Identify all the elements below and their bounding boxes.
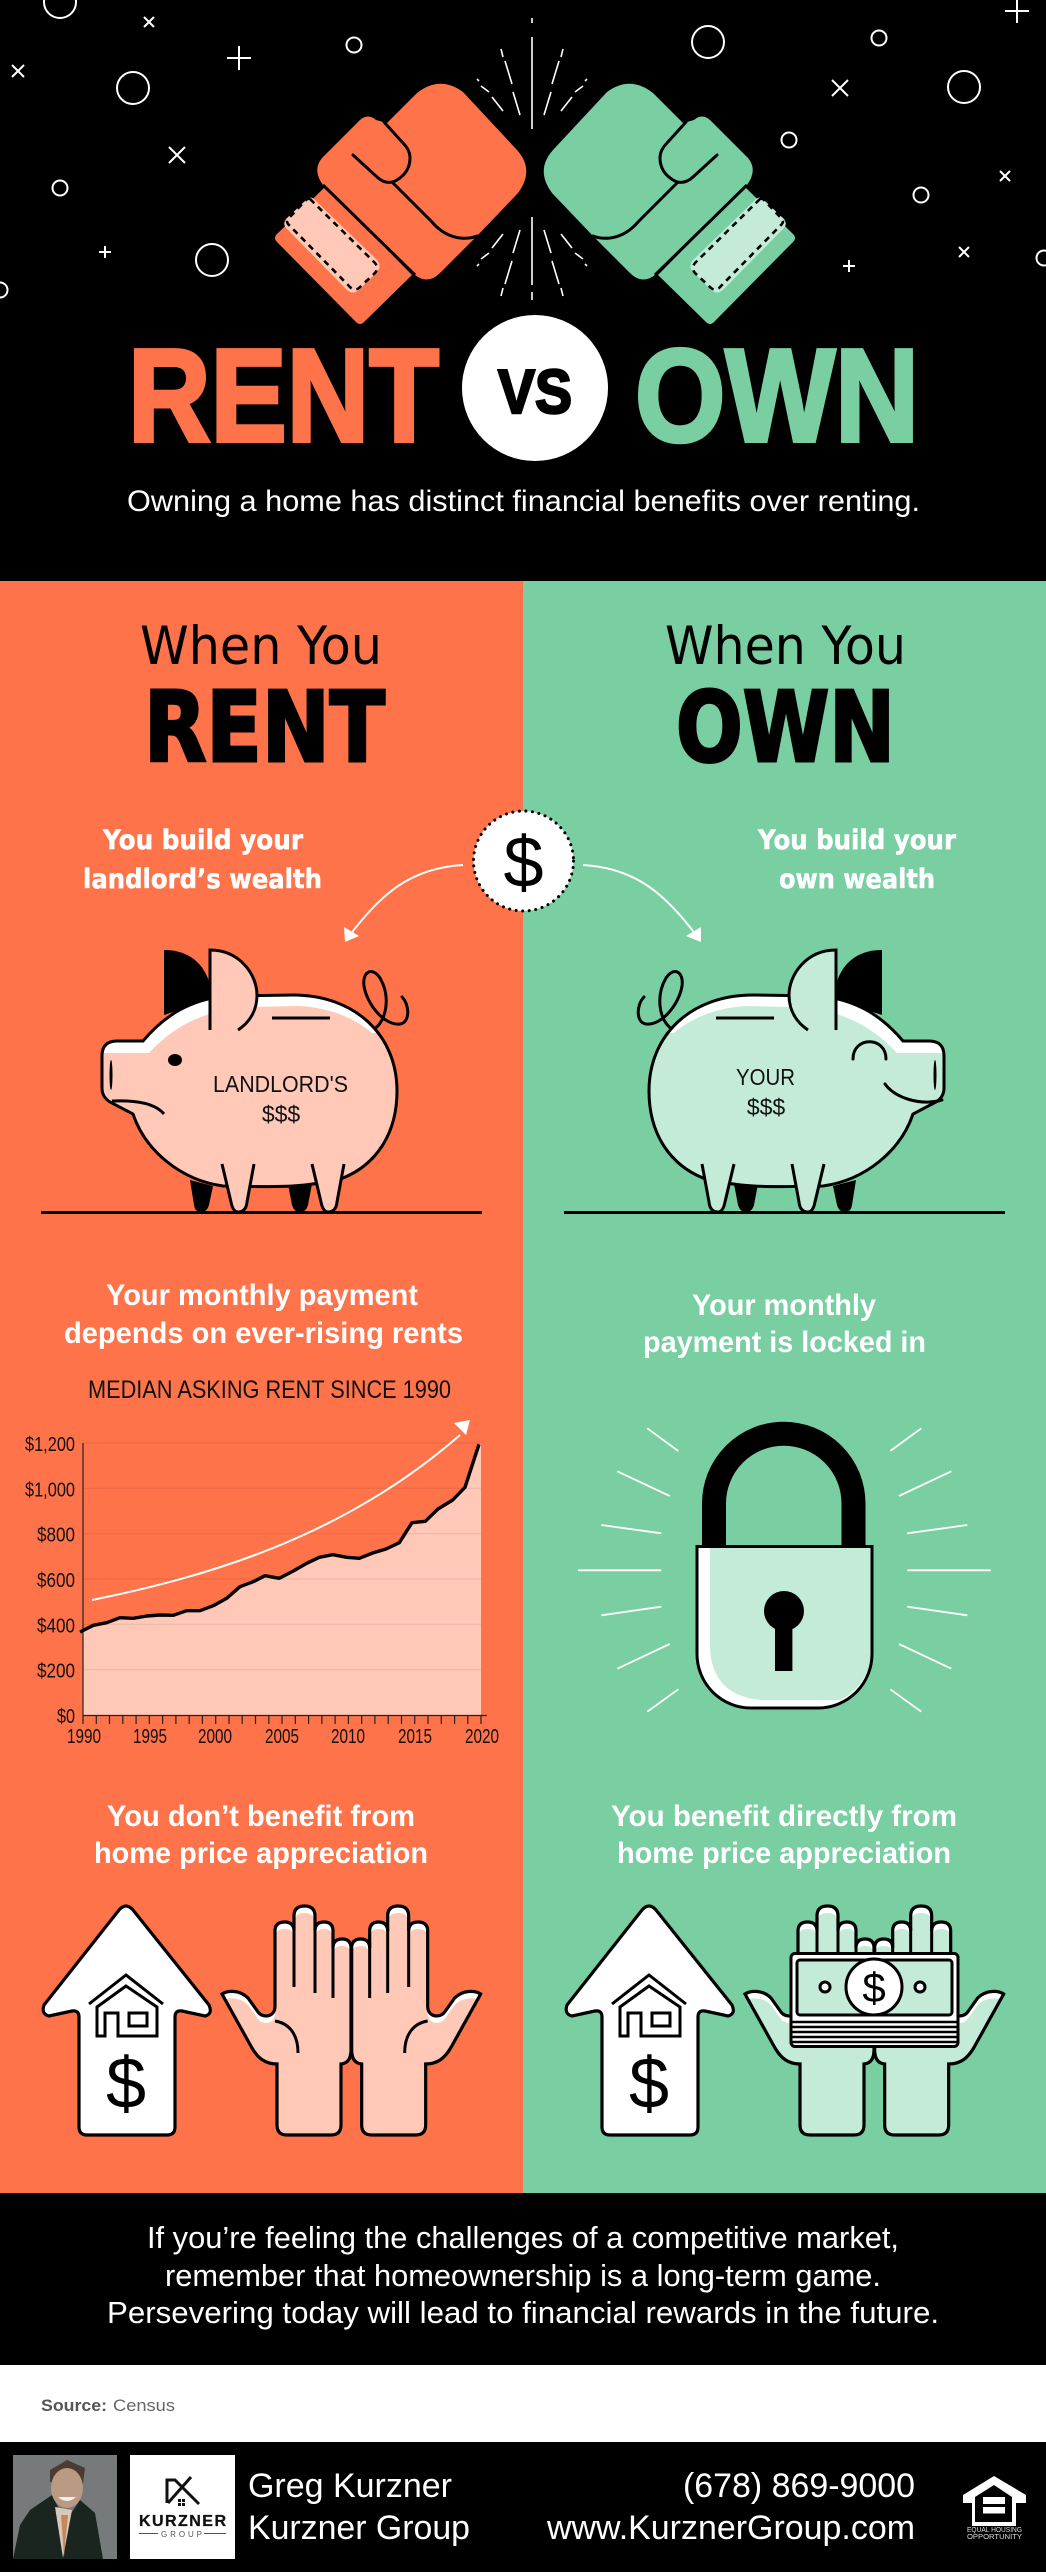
panel: source bbox=[0, 2365, 1046, 2442]
icon: orange boxing glove bbox=[275, 84, 526, 324]
panel: when you own bbox=[523, 581, 1046, 2193]
icon: happy piggy bank bbox=[564, 950, 1005, 1212]
logo: Kurzner Group: GROUP bbox=[161, 2530, 202, 2539]
agent name bbox=[248, 2467, 470, 2547]
text: you don't benefit from home price appreciation bbox=[94, 1800, 428, 1870]
panel: closing message: Persevering today will lead to financial rewards in the future. bbox=[107, 2295, 939, 2330]
heading: when you rent: RENT bbox=[144, 671, 385, 784]
subtitle: Owning a home has distinct financial benefits over renting. bbox=[127, 485, 920, 518]
panel: source: Census bbox=[113, 2396, 175, 2415]
axes and ticks bbox=[83, 1443, 487, 1724]
burst rays between gloves bbox=[477, 18, 587, 300]
icon: hands holding money bbox=[745, 1906, 1004, 2142]
text: you benefit directly from home price appreciation: home price appreciation bbox=[617, 1837, 951, 1870]
y axis labels bbox=[25, 1434, 75, 1728]
arrow: rising trend bbox=[92, 1420, 470, 1600]
x axis labels: 2020 bbox=[465, 1726, 499, 1748]
icon: padlock with rays bbox=[578, 1428, 991, 1712]
money stack: $ bbox=[862, 1964, 886, 2011]
badge: vs: VS bbox=[498, 358, 572, 427]
text: you build your own wealth: You build your bbox=[757, 825, 957, 856]
agent name: Greg Kurzner bbox=[248, 2467, 452, 2505]
panel: when you rent bbox=[0, 581, 523, 2193]
text: you build your landlord's wealth bbox=[83, 825, 322, 895]
icon: house arrow with dollar: $ bbox=[106, 2044, 146, 2124]
y axis labels: $800 bbox=[37, 1525, 75, 1547]
x axis labels: 2000 bbox=[198, 1726, 232, 1748]
x axis labels: 1995 bbox=[133, 1726, 167, 1748]
y axis labels: $600 bbox=[37, 1570, 75, 1592]
x axis labels bbox=[67, 1726, 499, 1748]
heading: when you rent bbox=[140, 616, 385, 784]
arrow to own pig bbox=[583, 865, 701, 942]
agent contact: www.KurznerGroup.com bbox=[546, 2509, 915, 2547]
icon: dollar coin with arrows: $ bbox=[503, 823, 544, 903]
chart: median asking rent since 1990 bbox=[25, 1376, 499, 1748]
icon: house arrow with dollar: $ bbox=[629, 2044, 669, 2124]
text: your monthly payment is locked in: payment is locked in bbox=[643, 1326, 926, 1359]
text: you build your own wealth: own wealth bbox=[779, 864, 935, 895]
heading: when you rent: When You bbox=[140, 616, 382, 677]
arrow to landlord pig bbox=[344, 865, 463, 942]
icon: green boxing glove bbox=[544, 84, 795, 324]
heading: when you own bbox=[665, 616, 906, 784]
text: you build your landlord's wealth: landlord’s wealth bbox=[83, 864, 322, 895]
text: your monthly payment depends on ever-rising rents: Your monthly payment bbox=[106, 1279, 418, 1312]
x axis labels: 1990 bbox=[67, 1726, 101, 1748]
title: RENT: RENT bbox=[128, 322, 439, 469]
chart title: MEDIAN ASKING RENT SINCE 1990 bbox=[88, 1376, 451, 1404]
text: you benefit directly from home price appreciation bbox=[611, 1800, 957, 1870]
text: you benefit directly from home price appreciation: You benefit directly from bbox=[611, 1800, 957, 1833]
lock rays bbox=[578, 1428, 991, 1712]
text: your monthly payment is locked in: Your monthly bbox=[692, 1289, 876, 1322]
agent contact: (678) 869-9000 bbox=[683, 2467, 915, 2505]
panel: closing message bbox=[0, 2193, 1046, 2365]
icon: empty open hands bbox=[222, 1906, 481, 2142]
text: your monthly payment is locked in bbox=[643, 1289, 926, 1359]
icon: equal housing opportunity bbox=[963, 2476, 1026, 2541]
icon: equal housing opportunity: EQUAL HOUSING bbox=[967, 2525, 1022, 2534]
agent photo bbox=[13, 2455, 117, 2559]
text: you don't benefit from home price appreciation: home price appreciation bbox=[94, 1837, 428, 1870]
y axis labels: $400 bbox=[37, 1615, 75, 1637]
x axis labels: 2010 bbox=[331, 1726, 365, 1748]
heading: when you own: OWN bbox=[676, 671, 895, 784]
text: you don't benefit from home price appreciation: You don’t benefit from bbox=[107, 1800, 415, 1833]
y axis labels: $200 bbox=[37, 1661, 75, 1683]
y axis labels: $1,200 bbox=[25, 1434, 75, 1456]
icon: sad landlord piggy bank bbox=[41, 950, 482, 1212]
logo: Kurzner Group: KURZNER bbox=[139, 2513, 226, 2530]
icon: happy piggy bank: YOUR bbox=[736, 1064, 795, 1090]
agent name: Kurzner Group bbox=[248, 2509, 470, 2547]
rent line bbox=[80, 1444, 479, 1632]
icon: house arrow with dollar bbox=[43, 1906, 210, 2135]
icon: dollar coin with arrows bbox=[344, 811, 701, 942]
heading: when you own: When You bbox=[665, 616, 906, 677]
icon: house arrow with dollar bbox=[566, 1906, 733, 2135]
icon: sad landlord piggy bank: $$$ bbox=[262, 1101, 300, 1127]
panel: source: Source: bbox=[41, 2396, 107, 2415]
icon: equal housing opportunity: OPPORTUNITY bbox=[967, 2532, 1022, 2541]
text: you build your own wealth bbox=[757, 825, 957, 895]
panel: closing message: remember that homeownership is a long-term game. bbox=[165, 2258, 881, 2293]
panel: header bbox=[0, 0, 1046, 581]
money stack bbox=[791, 1954, 958, 2046]
y axis labels: $1,000 bbox=[25, 1479, 75, 1501]
text: you build your landlord's wealth: You build your bbox=[102, 825, 304, 856]
icon: sad landlord piggy bank: LANDLORD'S bbox=[213, 1071, 348, 1097]
text: your monthly payment depends on ever-rising rents: depends on ever-rising rents bbox=[64, 1317, 463, 1350]
x axis labels: 2005 bbox=[265, 1726, 299, 1748]
agent contact bbox=[546, 2467, 915, 2547]
panel: agent footer bbox=[0, 2442, 1046, 2572]
text: your monthly payment depends on ever-rising rents bbox=[64, 1279, 463, 1350]
icon: happy piggy bank: $$$ bbox=[747, 1094, 785, 1120]
badge: vs bbox=[462, 315, 608, 461]
panel: closing message: If you’re feeling the challenges of a competitive market, bbox=[147, 2220, 899, 2255]
x axis labels: 2015 bbox=[398, 1726, 432, 1748]
title: OWN: OWN bbox=[635, 322, 919, 469]
area under rent line bbox=[83, 1444, 481, 1715]
logo: Kurzner Group bbox=[130, 2455, 235, 2559]
decorative background circles, crosses and plus signs bbox=[0, 0, 1046, 298]
y axis labels: $0 bbox=[57, 1706, 75, 1728]
